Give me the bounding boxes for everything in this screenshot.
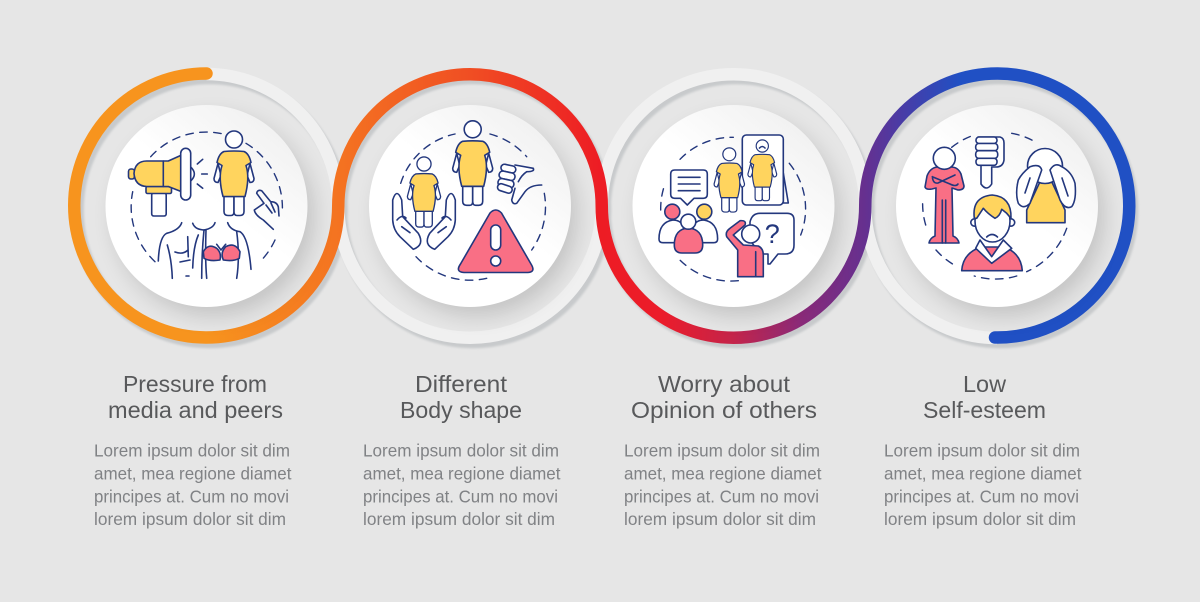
body text: amet, mea regione diamet (624, 464, 822, 484)
heading: Different (415, 371, 508, 397)
panel: pressure from media and peers (106, 105, 314, 316)
heading: Pressure from (123, 371, 267, 397)
white disc (369, 105, 571, 307)
icon: large woman (453, 121, 493, 205)
icon: warning triangle (458, 210, 533, 272)
text block: low self-esteem (884, 371, 1082, 529)
body text: lorem ipsum dolor sit dim (94, 509, 286, 529)
icon: person covering face (1017, 148, 1075, 223)
body text (624, 440, 822, 529)
body text: amet, mea regione diamet (884, 464, 1082, 484)
dashed circle (923, 133, 1067, 279)
icon: man with crossed arms (925, 147, 964, 243)
icon: confused man with question bubble (726, 213, 794, 277)
panel: different body shape (369, 105, 577, 316)
panel: low self-esteem (896, 105, 1104, 316)
icon: megaphone (128, 148, 207, 216)
text block: worry about opinion of others (624, 371, 822, 529)
icon: confused man with question bubble: ? (765, 219, 780, 249)
white disc (106, 105, 308, 307)
body text (884, 440, 1082, 529)
body text: lorem ipsum dolor sit dim (884, 509, 1076, 529)
heading (631, 371, 817, 423)
heading: Low (963, 371, 1006, 397)
icon: woman looking in mirror (714, 148, 744, 212)
icon: sad boy (962, 195, 1022, 271)
heading (108, 371, 283, 423)
body text: principes at. Cum no movi (363, 486, 558, 506)
coloured gradient loop line (74, 73, 1129, 338)
heading (923, 371, 1046, 423)
icon: thumbs down (497, 164, 542, 204)
dashed circle (131, 132, 282, 262)
body text: lorem ipsum dolor sit dim (363, 509, 555, 529)
panel: worry about opinion of others (632, 105, 840, 316)
icon: thumbs down (976, 137, 1004, 188)
body text: principes at. Cum no movi (624, 486, 819, 506)
text block: pressure from media and peers (94, 371, 292, 529)
body text: principes at. Cum no movi (884, 486, 1079, 506)
icon: pointing hand (254, 190, 279, 229)
body text (94, 440, 292, 529)
white disc (632, 105, 834, 307)
white disc (896, 105, 1098, 307)
icon: mirror with reflection (742, 135, 788, 205)
text block: different body shape (363, 371, 561, 529)
icon: woman in yellow dress (214, 131, 254, 216)
body text: amet, mea regione diamet (363, 464, 561, 484)
body text: Lorem ipsum dolor sit dim (363, 440, 559, 460)
body text: principes at. Cum no movi (94, 486, 289, 506)
body text: amet, mea regione diamet (94, 464, 292, 484)
body text: Lorem ipsum dolor sit dim (884, 440, 1080, 460)
pale complement ring segments (206, 74, 997, 338)
icon: male torso (158, 223, 205, 278)
dashed circle (401, 134, 545, 280)
heading: Worry about (658, 371, 791, 397)
body text: Lorem ipsum dolor sit dim (94, 440, 290, 460)
heading: Opinion of others (631, 397, 817, 423)
icon: left caring hand (393, 194, 421, 249)
body text (363, 440, 561, 529)
icon: small woman (407, 157, 441, 227)
icon: right caring hand (427, 194, 455, 249)
heading: Self-esteem (923, 397, 1046, 423)
heading: media and peers (108, 397, 283, 423)
icon: speech bubble (671, 170, 707, 205)
body text: lorem ipsum dolor sit dim (624, 509, 816, 529)
icon: group of three people (659, 204, 718, 253)
loop ring shadow (78, 78, 1132, 342)
heading: Body shape (400, 397, 522, 423)
body text: Lorem ipsum dolor sit dim (624, 440, 820, 460)
dashed circle (661, 137, 806, 281)
heading (400, 371, 522, 423)
icon: female torso with pink bra (202, 223, 251, 278)
